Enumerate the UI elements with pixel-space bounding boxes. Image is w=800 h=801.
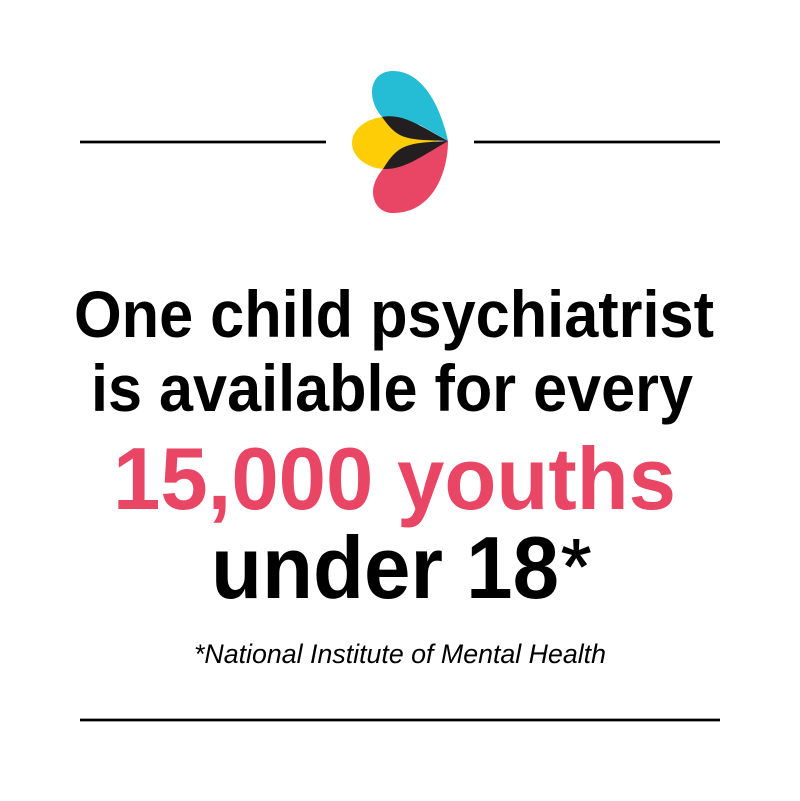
- footnote asterisk: *: [561, 522, 591, 610]
- highlighted statistic: 15,000 youths: [113, 429, 676, 528]
- icon: three-petal logo: [352, 71, 448, 213]
- heading line 4: under 18: [211, 518, 559, 617]
- heading line 1: One child psychiatrist: [74, 277, 714, 351]
- heading line 2: is available for every: [91, 351, 693, 425]
- source footnote: *National Institute of Mental Health: [194, 639, 606, 669]
